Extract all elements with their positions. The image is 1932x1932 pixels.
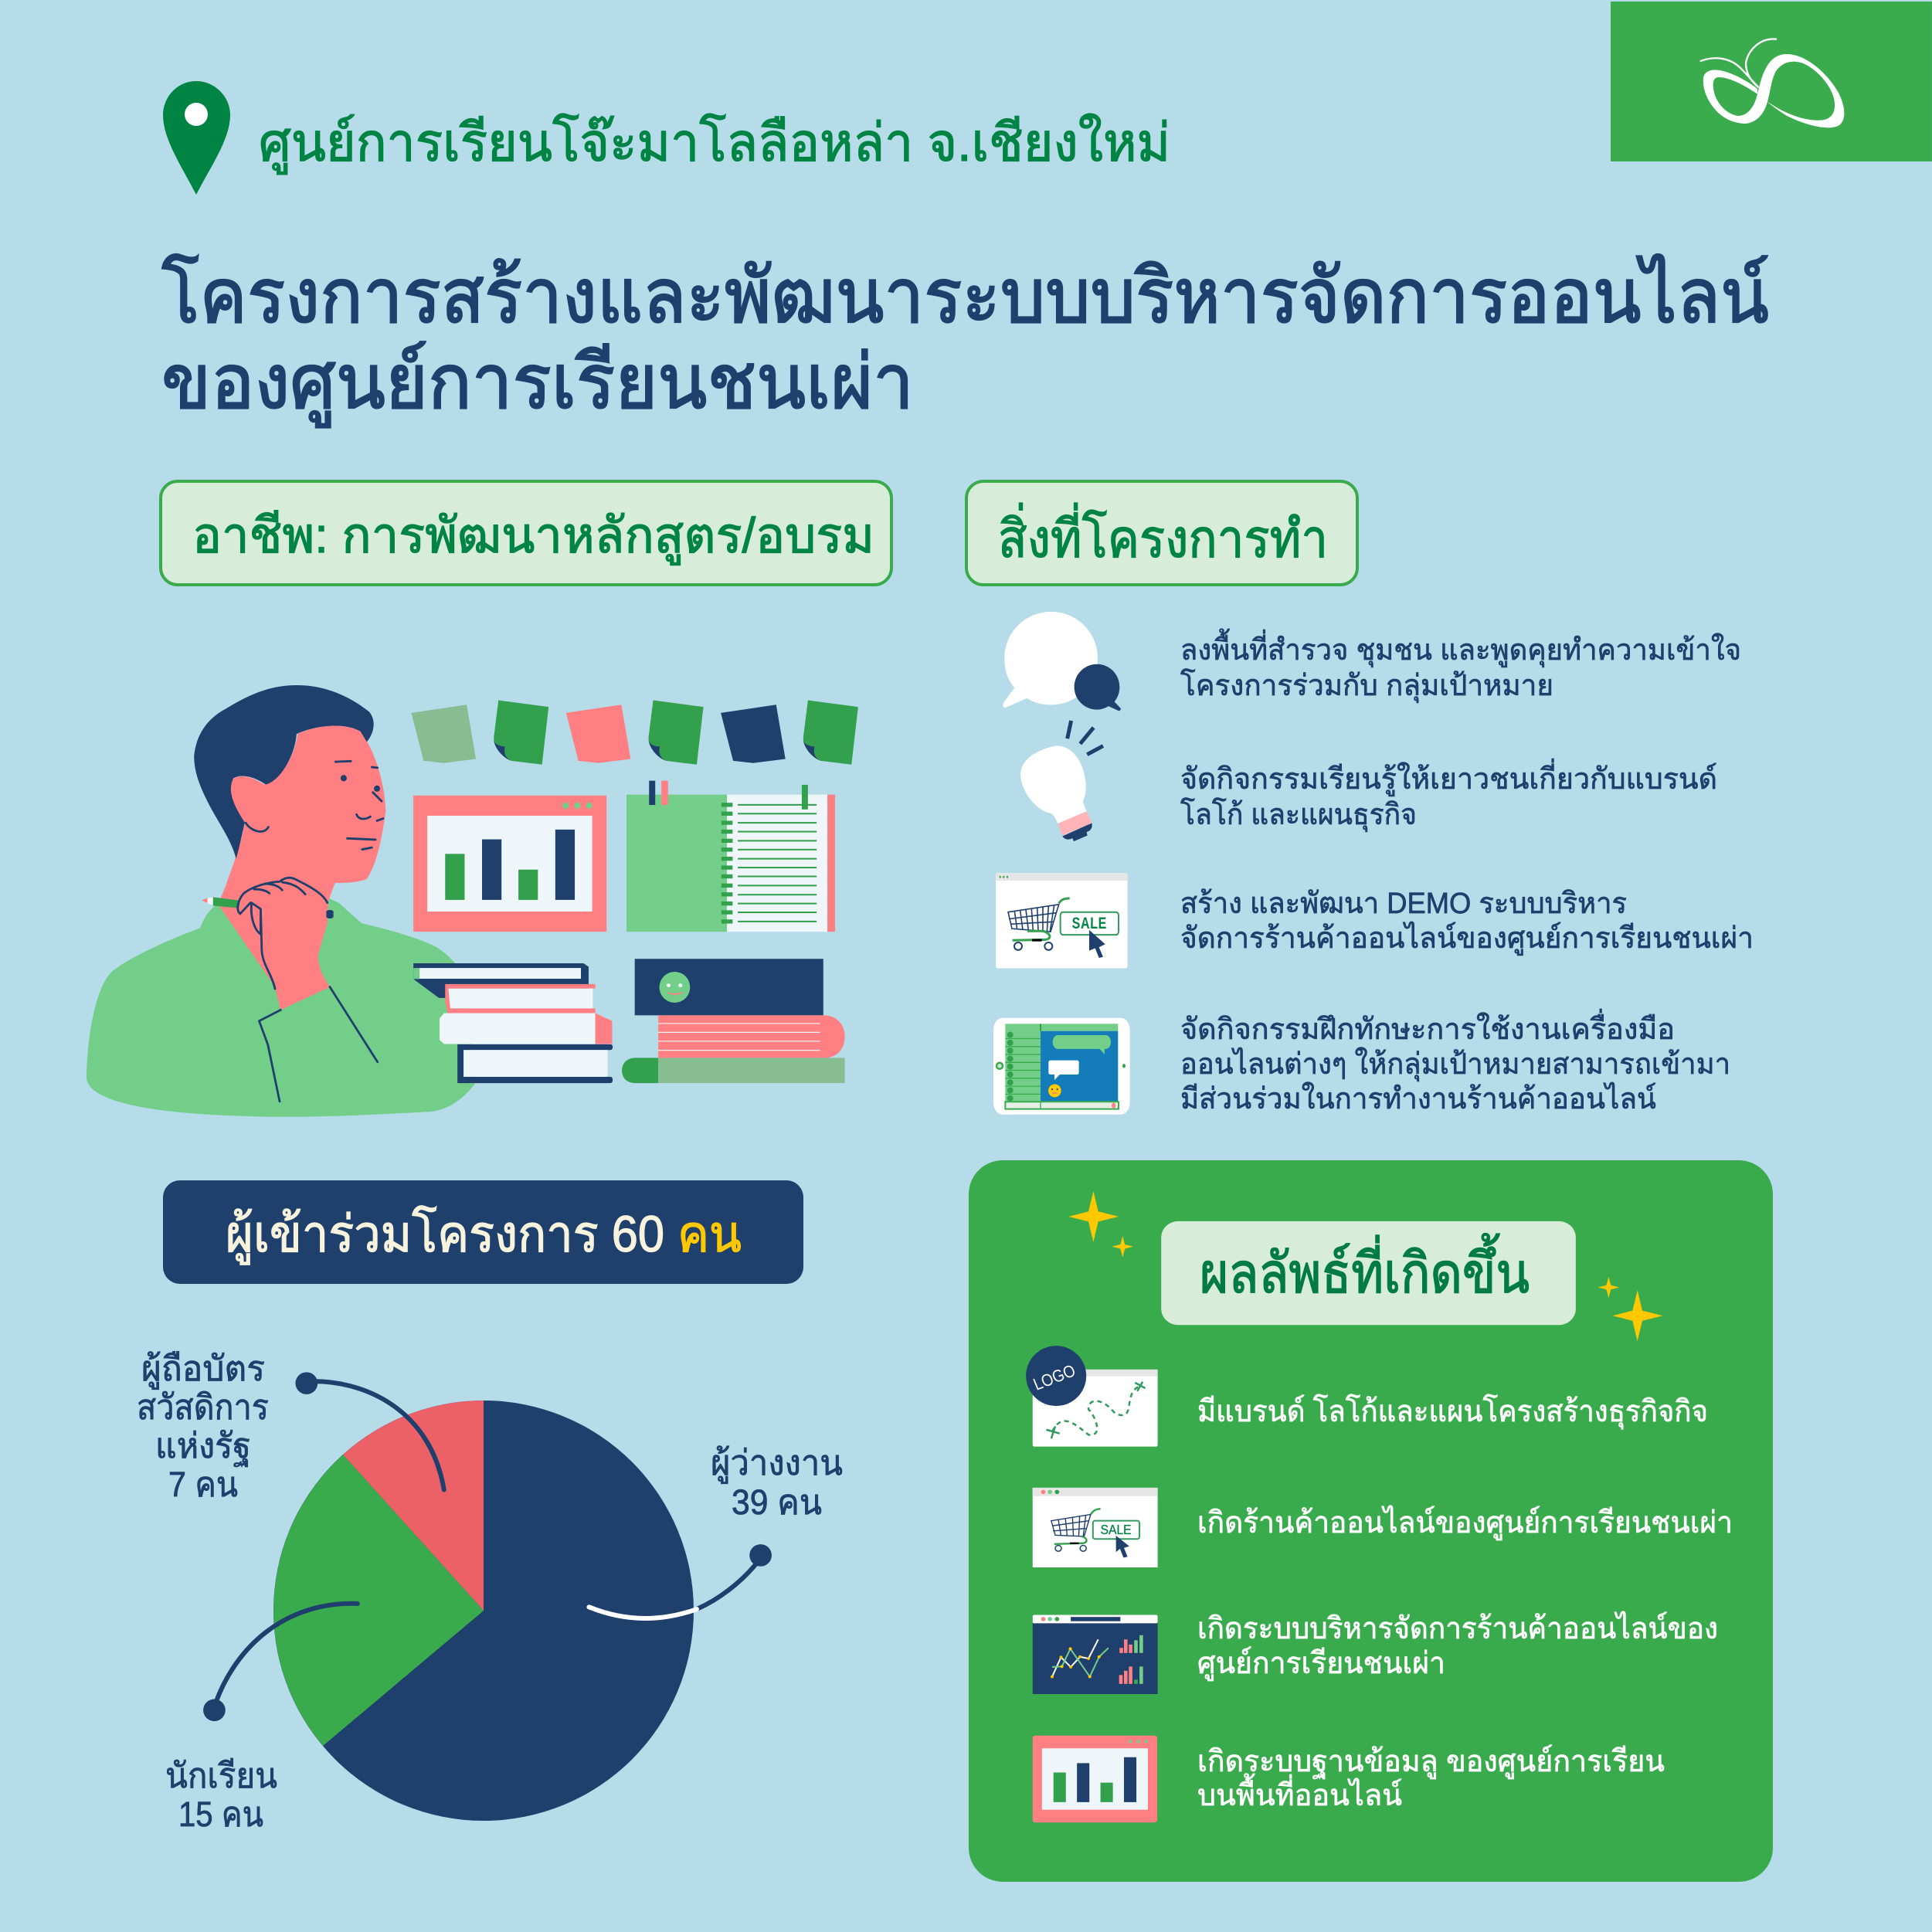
icon: database chart [1033,1736,1157,1822]
results text: เกิดร้านค้าออนไลน์ของศูนย์การเรียนชนเผ่า [1197,1506,1733,1540]
sparkles [1068,1191,1662,1341]
face and neck [218,726,385,1010]
activities text: สร้าง และพัฒนา DEMO ระบบบริหาร [1180,888,1627,920]
sticky notes [411,701,858,765]
icon: online store: SALE [1101,1522,1132,1537]
activities text: โลโก้ และแผนธุรกิจ [1180,797,1417,832]
panel: occupation label: อาชีพ: การพัฒนาหลักสูตร/อบรม [192,508,874,565]
right book stack [622,959,845,1083]
logo panel [1611,2,1932,161]
activities text: โครงการร่วมกับ กลุ่มเป้าหมาย [1180,668,1553,703]
panel: occupation label [161,481,891,585]
pie labels: 7 คน [168,1465,238,1504]
activities text [1180,628,1754,1115]
icon: logo map: LOGO [1031,1361,1078,1394]
location heading: ศูนย์การเรียนโจ๊ะมาโลลือหล่า จ.เชียงใหม่ [259,113,1170,175]
results heading: ผลลัพธ์ที่เกิดขึ้น [1200,1233,1530,1305]
icon: location pin [163,81,230,195]
illustration: person with books and charts [87,685,858,1117]
pie labels: สวัสดิการ [137,1387,269,1427]
pie labels: 39 คน [732,1482,822,1522]
icon: logo map [1026,1346,1158,1447]
icon: tablet chat [993,1018,1130,1115]
shirt [87,898,477,1117]
pencil [202,897,334,918]
title [161,253,1769,428]
pie labels [137,1349,843,1834]
spiral notebook [626,781,835,932]
results heading box [1161,1221,1576,1325]
activities text: จัดกิจกรรมฝึกทักษะการใช้งานเครื่องมือ [1180,1009,1675,1046]
icon: light bulb [1020,721,1103,841]
icon: dashboard [1033,1615,1158,1694]
icon: speech bubbles [1003,612,1121,711]
results text: ศูนย์การเรียนชนเผ่า [1197,1646,1445,1681]
title: ของศูนย์การเรียนชนเผ่า [161,339,914,428]
icon: online store [1033,1488,1158,1567]
pie labels: ผู้ว่างงาน [711,1443,843,1484]
pie labels: 15 คน [178,1794,263,1834]
pie chart [273,1401,694,1821]
results text: เกิดระบบฐานข้อมลู ของศูนย์การเรียน [1197,1744,1665,1779]
activities text: ลงพื้นที่สำรวจ ชุมชน และพูดคุยทำความเข้าใจ [1180,628,1741,667]
panel: project activities label: สิ่งที่โครงการทำ [998,503,1328,569]
participants banner: ผู้เข้าร่วมโครงการ 60 คน [226,1205,742,1265]
panel: project activities label [966,481,1357,585]
participants banner [163,1180,803,1284]
results text: บนพื้นที่ออนไลน์ [1197,1773,1402,1812]
results text: เกิดระบบบริหารจัดการร้านค้าออนไลน์ของ [1197,1611,1718,1645]
icon: online shop window: SALE [1072,915,1107,933]
activities text: ออนไลนต่างๆ ให้กลุ่มเป้าหมายสามารถเข้ามา [1180,1047,1730,1081]
results text: มีแบรนด์ โลโก้และแผนโครงสร้างธุรกิจกิจ [1197,1394,1708,1430]
activities text: จัดการร้านค้าออนไลน์ของศูนย์การเรียนชนเผ่า [1180,922,1754,956]
pie labels: แห่งรัฐ [155,1426,251,1467]
results text [1197,1394,1733,1812]
panel: results [969,1160,1773,1882]
pie leader lines [203,1372,772,1721]
activities text: มีส่วนร่วมในการทำงานร้านค้าออนไลน์ [1180,1082,1656,1115]
pie labels: ผู้ถือบัตร [141,1349,265,1390]
title: โครงการสร้างและพัฒนาระบบบริหารจัดการออนไลน์ [161,253,1769,338]
left book stack [413,963,613,1083]
bar chart board [413,796,606,932]
face lines and hand outline [238,761,383,1102]
icon: online shop window [996,873,1128,968]
icons: project activities [993,612,1130,1115]
activities text: จัดกิจกรรมเรียนรู้ให้เยาวชนเกี่ยวกับแบรนด์ [1180,759,1717,796]
hair [194,685,374,858]
pie labels: นักเรียน [165,1756,277,1795]
